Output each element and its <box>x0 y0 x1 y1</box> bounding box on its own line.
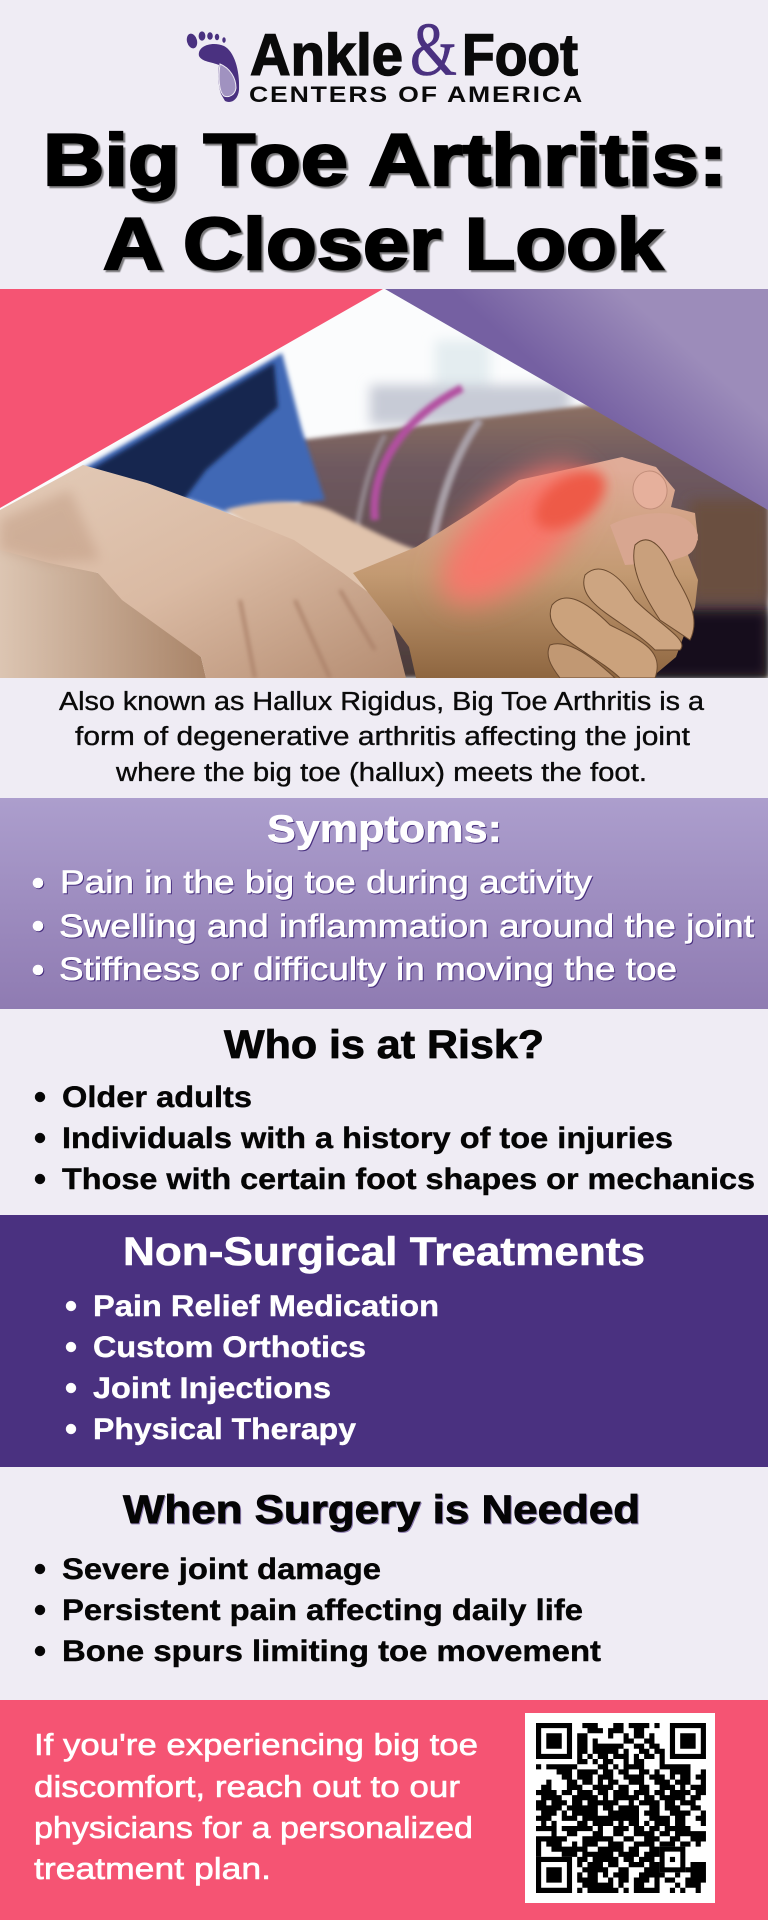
photo background <box>0 289 768 678</box>
panel: when surgery is needed <box>35 1488 640 1668</box>
list: symptoms: Stiffness or difficulty in moving the toe <box>59 951 677 987</box>
logo wordmark Foot: Foot <box>462 23 578 88</box>
panel: who is at risk <box>35 1023 755 1196</box>
intro text: form of degenerative arthritis affecting the joint <box>75 723 690 751</box>
fingers gripping toes <box>548 513 698 678</box>
list: treatments: Physical Therapy <box>93 1413 356 1446</box>
call to action text <box>34 1727 478 1886</box>
logo wordmark Ankle: Ankle <box>250 23 403 88</box>
thigh <box>0 548 206 678</box>
logo: Ankle & Foot Centers of America <box>185 8 584 107</box>
list: surgery reasons <box>35 1553 601 1668</box>
forearm behind foot <box>224 498 416 592</box>
list: symptoms <box>33 864 754 987</box>
call to action text: treatment plan. <box>34 1851 271 1886</box>
icon: purple foot <box>185 31 239 102</box>
foot <box>353 457 698 678</box>
call to action text: physicians for a personalized <box>34 1810 473 1845</box>
panel: call to action <box>0 1700 768 1920</box>
intro text: where the big toe (hallux) meets the foot. <box>115 759 647 787</box>
panel: symptoms <box>0 798 768 1009</box>
list: risk groups <box>35 1081 755 1196</box>
list: treatments: Joint Injections <box>93 1372 331 1405</box>
title <box>43 120 727 285</box>
title: A Closer Look <box>103 204 663 285</box>
hand on leg <box>0 465 406 678</box>
intro text <box>59 688 705 787</box>
toenail <box>632 470 668 510</box>
title: Big Toe Arthritis: <box>43 120 727 201</box>
intro text: Also known as Hallux Rigidus, Big Toe Arthritis is a <box>59 688 705 716</box>
QR code <box>525 1713 715 1903</box>
heading: who is at risk: Who is at Risk? <box>224 1023 544 1067</box>
purple corner triangle <box>385 289 768 510</box>
call to action text: If you're experiencing big toe <box>34 1727 478 1762</box>
panel: non-surgical treatments <box>0 1215 768 1467</box>
list: risk groups: Those with certain foot shapes or mechanics <box>62 1163 755 1196</box>
list: treatments: Custom Orthotics <box>93 1331 366 1364</box>
list: treatments: Pain Relief Medication <box>93 1290 439 1323</box>
list: surgery reasons: Bone spurs limiting toe movement <box>62 1635 601 1668</box>
list: symptoms: Pain in the big toe during activity <box>60 864 592 900</box>
pink corner triangle <box>0 289 383 508</box>
list: treatments <box>66 1290 439 1446</box>
hero image: hands holding inflamed foot <box>0 289 768 678</box>
call to action text: discomfort, reach out to our <box>34 1769 460 1804</box>
heading: when surgery is needed: When Surgery is Needed <box>123 1488 640 1532</box>
list: risk groups: Individuals with a history of toe injuries <box>62 1122 673 1155</box>
heading: symptoms: Symptoms: <box>267 808 502 851</box>
logo tagline: CENTERS OF AMERICA <box>249 82 584 107</box>
logo ampersand: & <box>410 8 457 92</box>
heading: non-surgical treatments: Non-Surgical Treatments <box>123 1230 645 1274</box>
blue shirt <box>80 353 325 512</box>
list: surgery reasons: Persistent pain affecting daily life <box>62 1594 583 1627</box>
inflamed red area <box>429 447 612 619</box>
list: surgery reasons: Severe joint damage <box>62 1553 381 1586</box>
list: risk groups: Older adults <box>62 1081 252 1114</box>
list: symptoms: Swelling and inflammation around the joint <box>59 908 754 944</box>
